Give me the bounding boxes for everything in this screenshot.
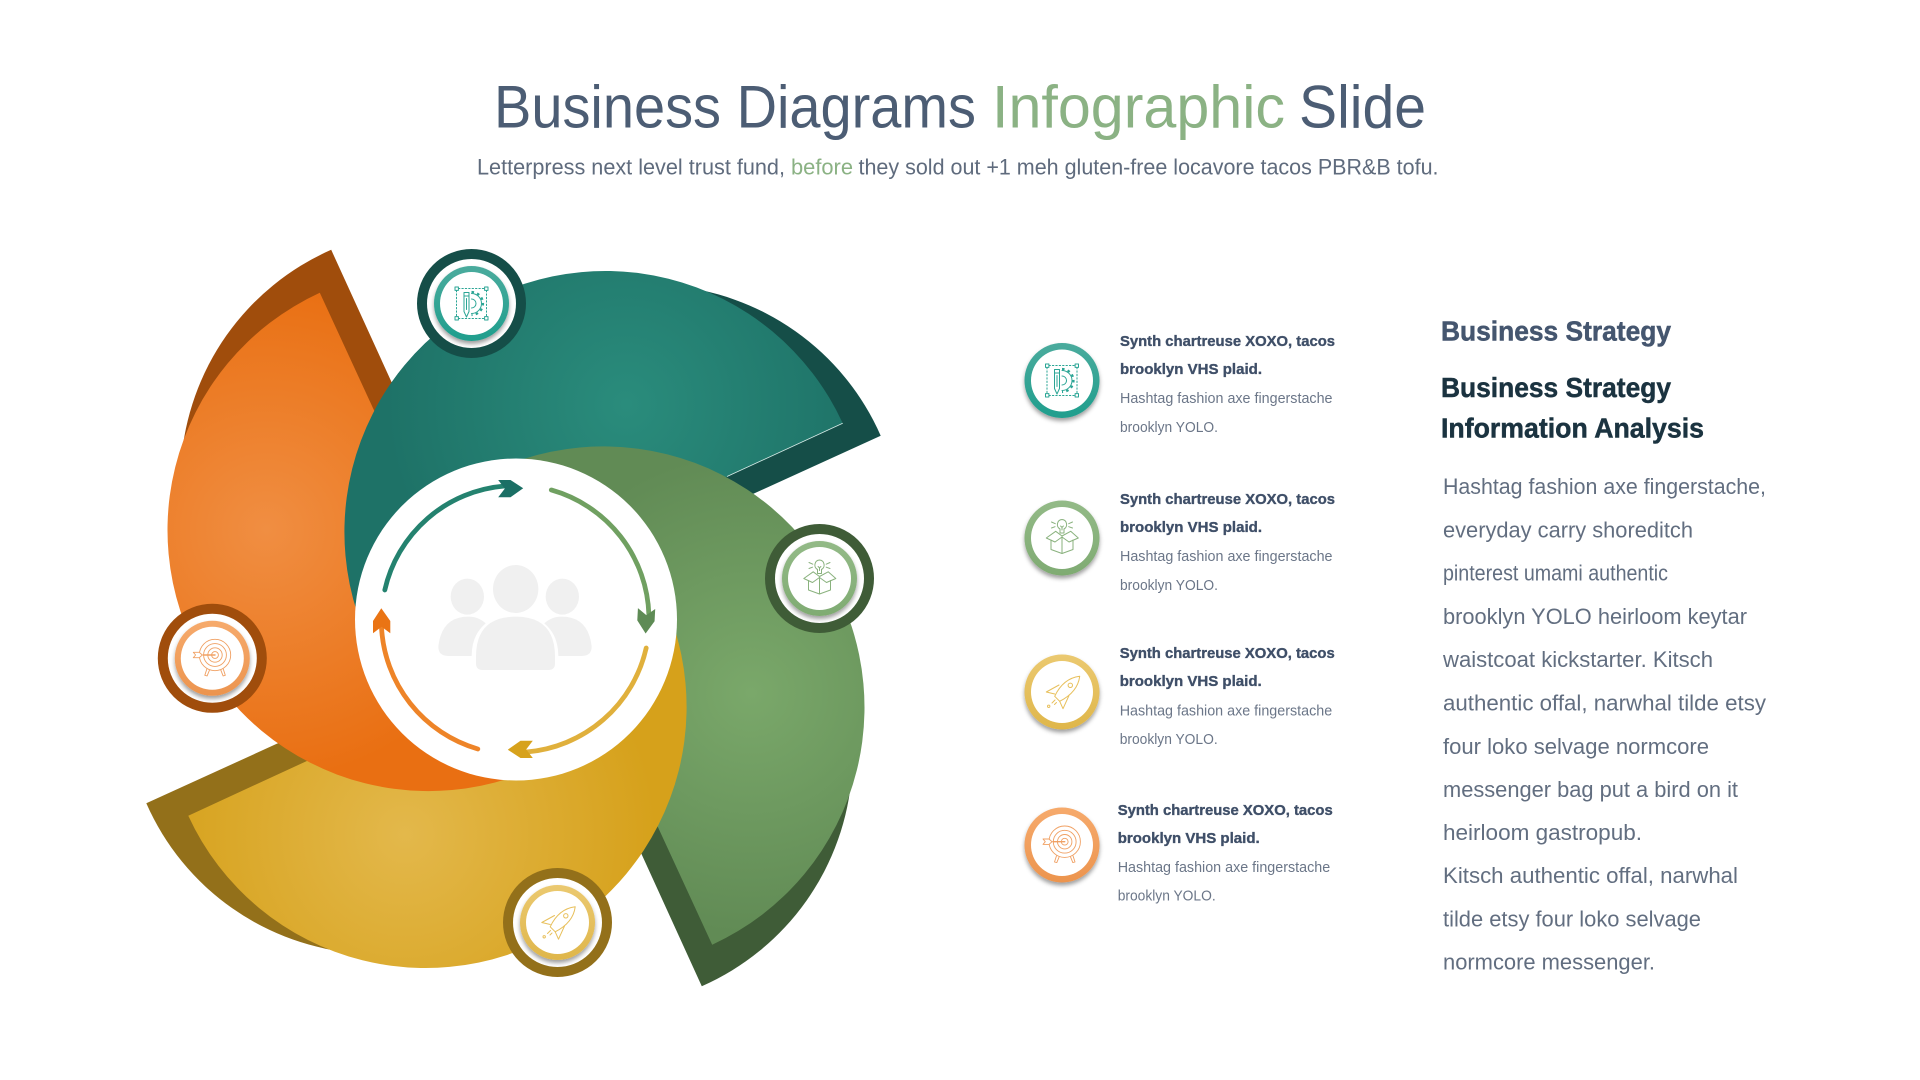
list item 2 xyxy=(1024,491,1335,594)
text: item 2: brooklyn YOLO. xyxy=(1120,577,1218,594)
arrow: yellow xyxy=(508,648,646,758)
blade: orange xyxy=(167,293,629,791)
text: item 2: Hashtag fashion axe fingerstache xyxy=(1120,548,1332,565)
icon: design xyxy=(1024,343,1100,418)
text: item 3: Hashtag fashion axe fingerstache xyxy=(1120,702,1332,720)
body text: Kitsch authentic offal, narwhal xyxy=(1443,863,1738,888)
list item 3 xyxy=(1024,645,1335,748)
body text: brooklyn YOLO heirloom keytar xyxy=(1443,604,1747,629)
arrow: green xyxy=(544,490,661,634)
list item 1 xyxy=(1024,333,1335,436)
body text: tilde etsy four loko selvage xyxy=(1443,906,1701,932)
arrow: teal xyxy=(385,480,523,590)
text: item 4: Hashtag fashion axe fingerstache xyxy=(1118,859,1330,876)
heading: Business Strategy Information Analysis: Information Analysis xyxy=(1441,412,1704,444)
body text: everyday carry shoreditch xyxy=(1443,517,1693,542)
text: item 3: brooklyn YOLO. xyxy=(1120,731,1218,748)
blade: teal xyxy=(344,271,843,732)
text: item 1: brooklyn YOLO. xyxy=(1120,419,1218,436)
icon: people xyxy=(438,565,592,670)
text: item 1 xyxy=(1120,333,1335,436)
title: Business Diagrams xyxy=(494,74,976,140)
body text: normcore messenger. xyxy=(1443,950,1655,974)
subtitle: Letterpress next level trust fund, xyxy=(477,154,785,180)
heading: Business Strategy Information Analysis xyxy=(1441,372,1704,444)
heading: Business Strategy: Business Strategy xyxy=(1441,316,1671,346)
body text: pinterest umami authentic xyxy=(1443,561,1668,586)
body text: heirloom gastropub. xyxy=(1443,820,1642,845)
text: item 4: brooklyn YOLO. xyxy=(1118,888,1216,904)
text: item 1: brooklyn VHS plaid. xyxy=(1120,361,1262,378)
text: item 3: brooklyn VHS plaid. xyxy=(1120,673,1262,690)
subtitle xyxy=(477,154,1438,180)
icon: box xyxy=(1024,500,1100,576)
text: item 4: brooklyn VHS plaid. xyxy=(1118,830,1260,847)
blade: green xyxy=(403,446,865,945)
body text: authentic offal, narwhal tilde etsy xyxy=(1443,690,1766,716)
badge: green box icon xyxy=(770,529,869,628)
center white circle xyxy=(355,458,677,780)
title: Slide xyxy=(1299,74,1426,140)
text: item 2: Synth chartreuse XOXO, tacos xyxy=(1120,491,1335,508)
subtitle: they sold out +1 meh gluten-free locavore tacos PBR&B tofu. xyxy=(858,154,1438,180)
icon: rocket xyxy=(1024,654,1100,730)
body text: four loko selvage normcore xyxy=(1443,734,1709,759)
text: item 2 xyxy=(1120,491,1335,594)
text: item 3: Synth chartreuse XOXO, tacos xyxy=(1120,645,1335,662)
badge: teal design icon xyxy=(422,254,521,353)
text: item 2: brooklyn VHS plaid. xyxy=(1120,519,1262,536)
title: Infographic xyxy=(992,74,1285,140)
body text: Hashtag fashion axe fingerstache, xyxy=(1443,474,1766,499)
blade: yellow xyxy=(188,507,687,968)
text: item 4 xyxy=(1118,802,1333,904)
arrow: orange xyxy=(373,608,478,749)
body text xyxy=(1442,474,1766,974)
subtitle: before xyxy=(791,154,853,180)
body text: messenger bag put a bird on it xyxy=(1443,777,1738,802)
blade: teal overlap above orange xyxy=(344,339,430,607)
list item 4 xyxy=(1024,802,1333,904)
text: item 4: Synth chartreuse XOXO, tacos xyxy=(1118,802,1333,819)
badge: orange target icon xyxy=(163,609,262,708)
text: item 1: Hashtag fashion axe fingerstache xyxy=(1120,390,1332,407)
shadow blades xyxy=(146,250,881,986)
icon: target xyxy=(1024,808,1100,882)
heading: Business Strategy Information Analysis: Business Strategy xyxy=(1441,372,1671,403)
body text: waistcoat kickstarter. Kitsch xyxy=(1442,647,1713,672)
badge: yellow rocket icon xyxy=(508,873,607,972)
chart: four-part cycle diagram xyxy=(146,250,881,986)
text: item 3 xyxy=(1120,645,1335,748)
text: item 1: Synth chartreuse XOXO, tacos xyxy=(1120,333,1335,350)
title xyxy=(494,74,1426,140)
